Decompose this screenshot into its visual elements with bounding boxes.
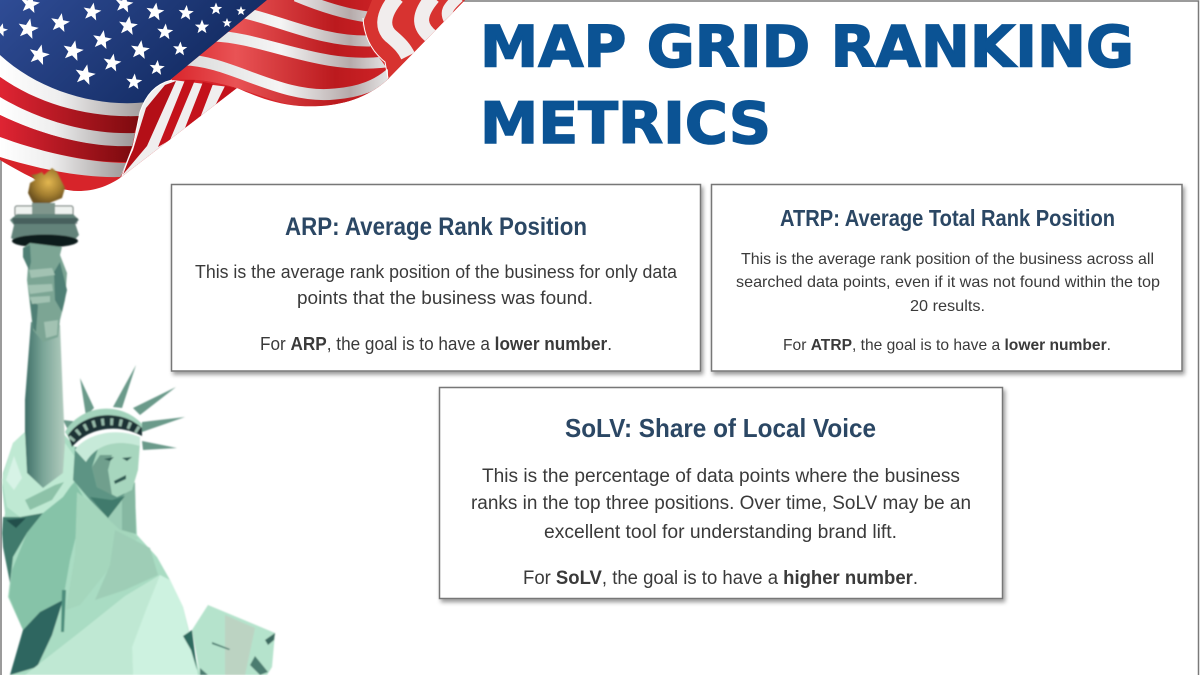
torch platform [15, 206, 73, 216]
raised arm [25, 322, 65, 488]
panel: ARP [172, 184, 700, 371]
text block: ATRP description: searched data points, even if it was not found within the top [736, 274, 1160, 291]
text block: SoLV description: excellent tool for understanding brand lift. [544, 522, 897, 543]
heading: ATRP: ATRP: Average Total Rank Position [780, 205, 1115, 231]
icon: American flag [0, 0, 470, 195]
text block: SoLV description: ranks in the top three positions. Over time, SoLV may be an [471, 493, 971, 514]
right stripes [170, 0, 392, 106]
hand [23, 243, 67, 342]
text block: ATRP description: 20 results. [910, 298, 985, 315]
neck and head [107, 490, 136, 534]
title [480, 14, 1134, 157]
text block: ARP goal: For ARP, the goal is to have a lower number. [260, 334, 612, 354]
text block: ARP description: This is the average rank position of the business for only data [195, 262, 678, 282]
panel: SoLV [440, 388, 1002, 598]
title: METRICS [480, 91, 771, 157]
text block: ATRP description [736, 251, 1160, 315]
tablet [192, 605, 275, 675]
sleeve [2, 433, 75, 517]
canton [0, 0, 267, 103]
panel: ATRP [712, 184, 1182, 371]
flag base [0, 0, 470, 195]
text block: ATRP goal: For ATRP, the goal is to have a lower number. [783, 337, 1111, 354]
fold highlights [122, 80, 172, 176]
text block: ARP description [195, 262, 678, 308]
title: MAP GRID RANKING [480, 14, 1134, 80]
robe light panel [25, 575, 160, 675]
left sleeve mass [2, 513, 43, 583]
text block: SoLV goal: For SoLV, the goal is to have a higher number. [523, 568, 918, 589]
text block: ATRP description: This is the average rank position of the business across all [741, 251, 1154, 268]
heading: SoLV: SoLV: Share of Local Voice [565, 413, 876, 443]
underside stripes [120, 80, 237, 178]
chest shading [95, 530, 158, 600]
robe folds [9, 482, 85, 633]
text block: ARP description: points that the business was found. [297, 288, 593, 308]
crown spikes [63, 365, 185, 450]
lower-left red and white stripes [0, 55, 144, 116]
text block: SoLV description: This is the percentage of data points where the business [482, 466, 960, 487]
robe silhouette [2, 432, 200, 675]
crown [65, 409, 142, 440]
far-right fold [362, 0, 470, 82]
icon: Statue of Liberty [2, 168, 275, 675]
torch flame [28, 168, 65, 204]
text block: SoLV description [471, 466, 971, 543]
heading: ARP: ARP: Average Rank Position [285, 213, 587, 241]
stars [0, 0, 246, 90]
